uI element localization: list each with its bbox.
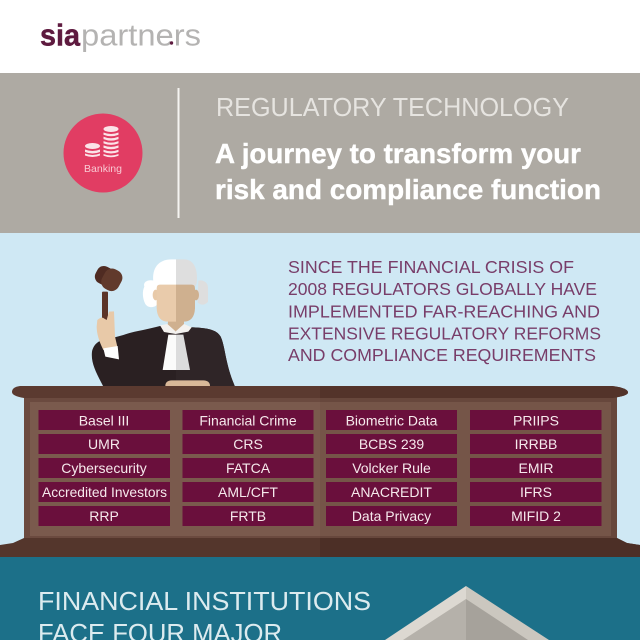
text block: intro: EXTENSIVE REGULATORY REFORMS <box>288 324 601 344</box>
column: regulations 2: CRS <box>233 436 263 452</box>
column: regulations 4: IRRBB <box>515 436 557 452</box>
column: regulations 3: BCBS 239 <box>359 436 424 452</box>
panel: four major challenges <box>0 557 640 640</box>
heading: financial institutions: FINANCIAL INSTITUTIONS <box>38 586 371 616</box>
column: regulations 4: IFRS <box>520 484 552 500</box>
heading: regulatory technology: REGULATORY TECHNOLOGY <box>216 92 569 122</box>
title: a journey to transform: A journey to transform your <box>215 138 581 169</box>
column: regulations 3: ANACREDIT <box>351 484 432 500</box>
column: regulations 4: MIFID 2 <box>511 508 561 524</box>
column: regulations 2: AML/CFT <box>218 484 278 500</box>
column: regulations 4 <box>470 410 602 526</box>
column: regulations 3: Data Privacy <box>352 508 431 524</box>
column: regulations 2 <box>182 410 314 526</box>
column: regulations 1: RRP <box>89 508 119 524</box>
icon: building roof <box>385 586 549 640</box>
text block: intro: AND COMPLIANCE REQUIREMENTS <box>288 345 596 365</box>
logo: sia partners: sia <box>40 18 81 52</box>
icon: judge with gavel <box>91 259 235 387</box>
column: regulations 4: EMIR <box>518 460 554 476</box>
panel: judge bench <box>0 386 640 557</box>
column: regulations 1: Basel III <box>79 412 129 428</box>
title: a journey to transform <box>215 138 601 205</box>
panel: header banner <box>0 73 640 233</box>
text block: intro: SINCE THE FINANCIAL CRISIS OF <box>288 257 574 277</box>
column: regulations 3: Volcker Rule <box>352 460 431 476</box>
title: a journey to transform: risk and compliance function <box>215 174 601 205</box>
logo: sia partners: partners <box>81 18 201 52</box>
text block: intro: IMPLEMENTED FAR-REACHING AND <box>288 302 600 322</box>
column: regulations 3 <box>326 410 457 526</box>
text block: intro <box>288 257 601 365</box>
text block: intro: 2008 REGULATORS GLOBALLY HAVE <box>288 279 597 299</box>
column: regulations 1: Cybersecurity <box>61 460 147 476</box>
column: regulations 3: Biometric Data <box>346 412 438 428</box>
column: regulations 1 <box>38 410 170 526</box>
column: regulations 1: UMR <box>88 436 120 452</box>
column: regulations 4: PRIIPS <box>513 412 559 428</box>
column: regulations 2: FATCA <box>226 460 271 476</box>
icon: banking badge: Banking <box>84 163 122 175</box>
column: regulations 1: Accredited Investors <box>42 484 167 500</box>
heading: financial institutions <box>38 586 371 640</box>
panel: courtroom scene <box>0 233 640 558</box>
column: regulations 2: Financial Crime <box>199 412 297 428</box>
icon: banking badge <box>64 114 142 192</box>
column: regulations 2: FRTB <box>230 508 266 524</box>
